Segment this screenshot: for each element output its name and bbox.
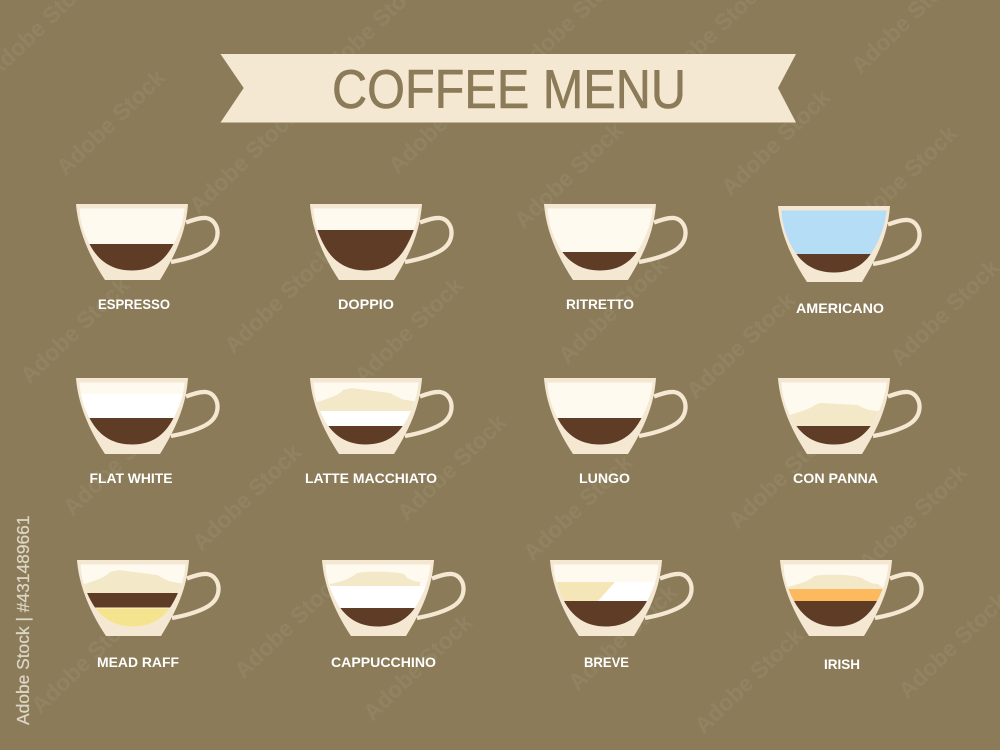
cup: doppio: DOPPIO — [338, 296, 394, 312]
cup: lungo: LUNGO — [579, 470, 630, 486]
cup: flat white — [76, 378, 218, 486]
cup: latte macchiato: LATTE MACCHIATO — [305, 470, 437, 486]
title banner — [220, 54, 796, 122]
watermark pattern: Adobe Stock — [843, 120, 962, 236]
watermark pattern: Adobe Stock — [723, 417, 842, 533]
watermark pattern: Adobe Stock — [15, 272, 134, 388]
cup: flat white: FLAT WHITE — [90, 470, 172, 486]
cup: latte macchiato — [305, 378, 452, 486]
watermark pattern: Adobe Stock — [509, 117, 628, 233]
cup: irish — [780, 560, 922, 672]
watermark pattern: Adobe Stock — [518, 449, 637, 565]
cup: cappuccino — [322, 560, 464, 670]
watermark pattern: Adobe Stock — [219, 242, 338, 358]
cup: breve: BREVE — [584, 654, 629, 670]
title: COFFEE MENU — [332, 58, 686, 120]
cup: espresso: ESPRESSO — [98, 296, 170, 312]
cup: doppio — [310, 204, 452, 312]
cup: breve — [550, 560, 692, 670]
stock id text: Adobe Stock | #431489661 — [13, 515, 33, 725]
cup: irish: IRISH — [824, 656, 860, 672]
cup: ritretto: RITRETTO — [566, 296, 634, 312]
cup: espresso — [76, 204, 218, 312]
watermark pattern: Adobe Stock — [716, 84, 835, 200]
cup: cappuccino: CAPPUCCHINO — [331, 654, 436, 670]
watermark pattern: Adobe Stock — [58, 404, 177, 520]
watermark pattern: Adobe Stock — [358, 609, 477, 725]
watermark pattern: Adobe Stock — [383, 62, 502, 178]
watermark pattern: Adobe Stock — [563, 579, 682, 695]
cup: mead raff: MEAD RAFF — [97, 654, 179, 670]
watermark pattern: Adobe Stock — [229, 567, 348, 683]
watermark pattern: Adobe Stock — [51, 64, 170, 180]
watermark pattern: Adobe Stock — [853, 459, 972, 575]
watermark pattern: Adobe Stock — [187, 439, 306, 555]
cup: lungo — [544, 378, 686, 486]
cup: americano — [778, 206, 920, 316]
cup: americano: AMERICANO — [796, 300, 884, 316]
cup: con panna: CON PANNA — [793, 470, 878, 486]
watermark pattern: Adobe Stock — [392, 409, 511, 525]
watermark pattern: Adobe Stock — [689, 622, 808, 738]
watermark pattern: Adobe Stock — [184, 102, 303, 218]
cup: con panna — [778, 378, 920, 486]
watermark pattern: Adobe Stock — [681, 287, 800, 403]
watermark pattern: Adobe Stock — [349, 272, 468, 388]
watermark pattern: Adobe Stock — [26, 602, 145, 718]
cup: ritretto — [544, 204, 686, 312]
cup: mead raff — [77, 560, 219, 670]
watermark pattern: Adobe Stock — [553, 252, 672, 368]
